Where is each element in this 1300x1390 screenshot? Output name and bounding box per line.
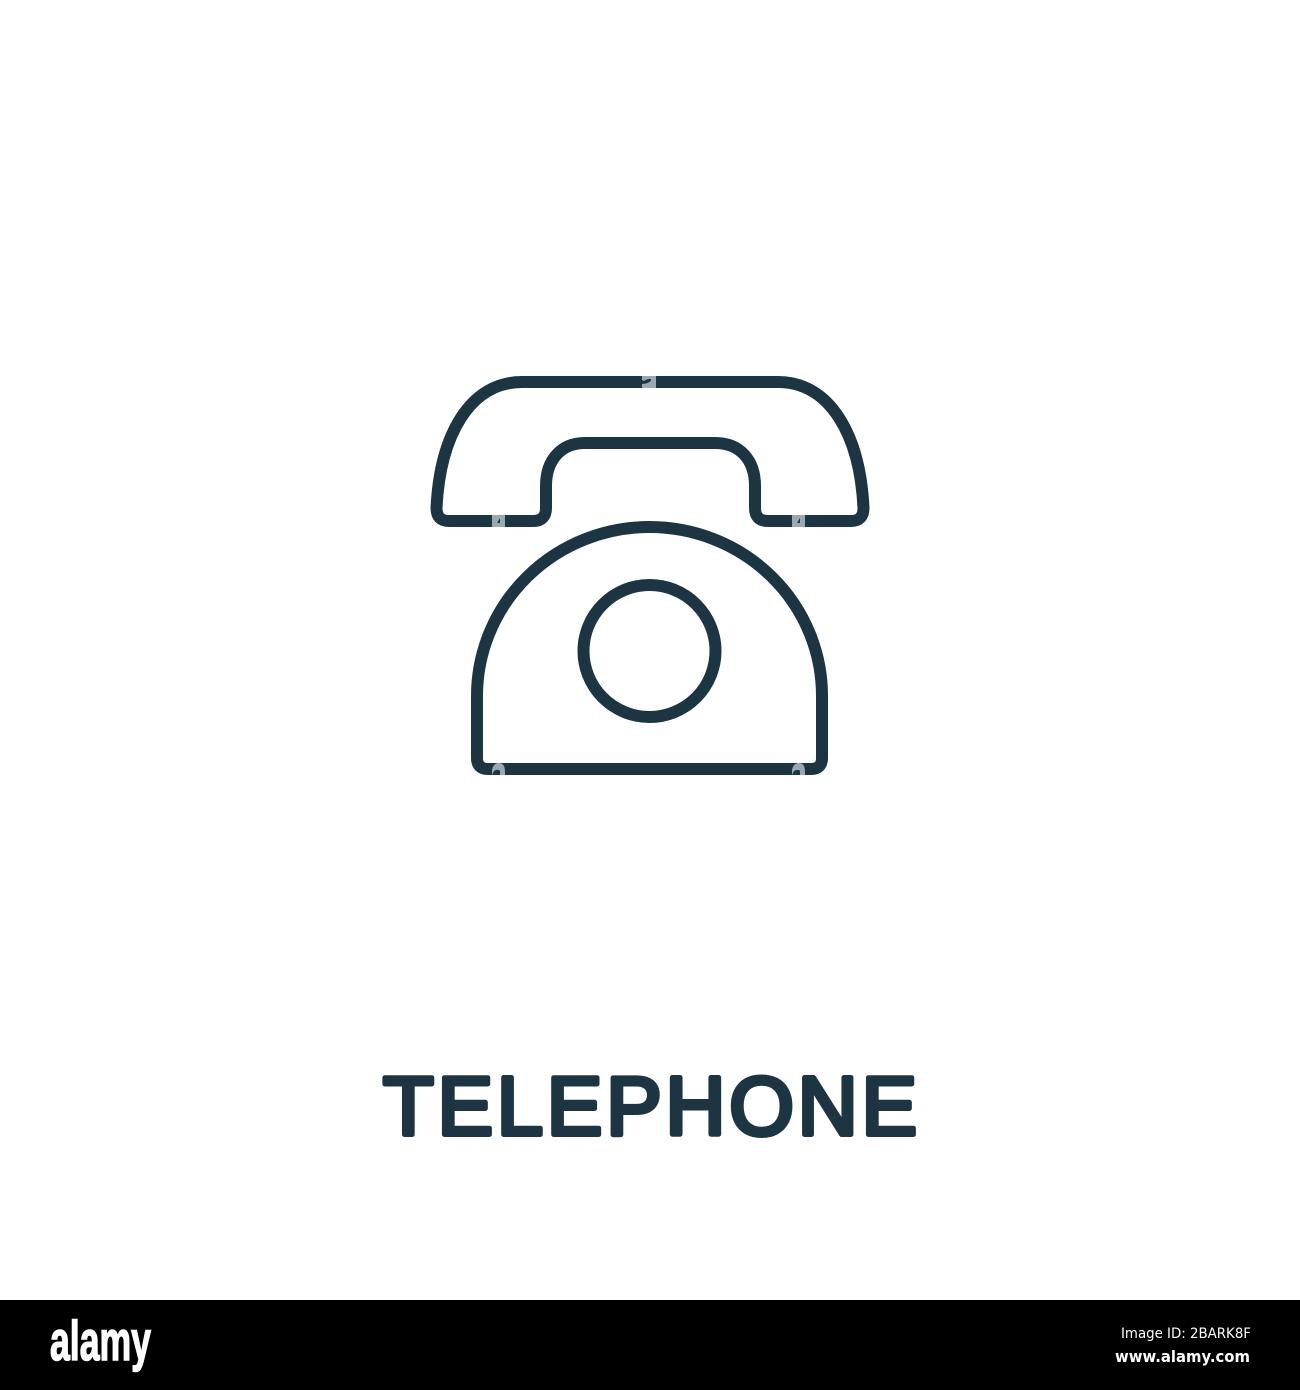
footer bar — [0, 1300, 1300, 1390]
icon: telephone — [436, 382, 864, 769]
image id text: Image ID: 2BARK8F — [1121, 1326, 1251, 1342]
icon: telephone handset — [436, 382, 864, 521]
title: TELEPHONE: TELEPHONE — [383, 1060, 917, 1152]
website url: www.alamy.com — [1115, 1347, 1250, 1366]
logo: alamy: alamy — [50, 1309, 151, 1372]
icon: telephone base — [477, 527, 822, 769]
watermark marks on icon strokes — [492, 376, 805, 775]
icon: telephone dial — [584, 585, 716, 717]
